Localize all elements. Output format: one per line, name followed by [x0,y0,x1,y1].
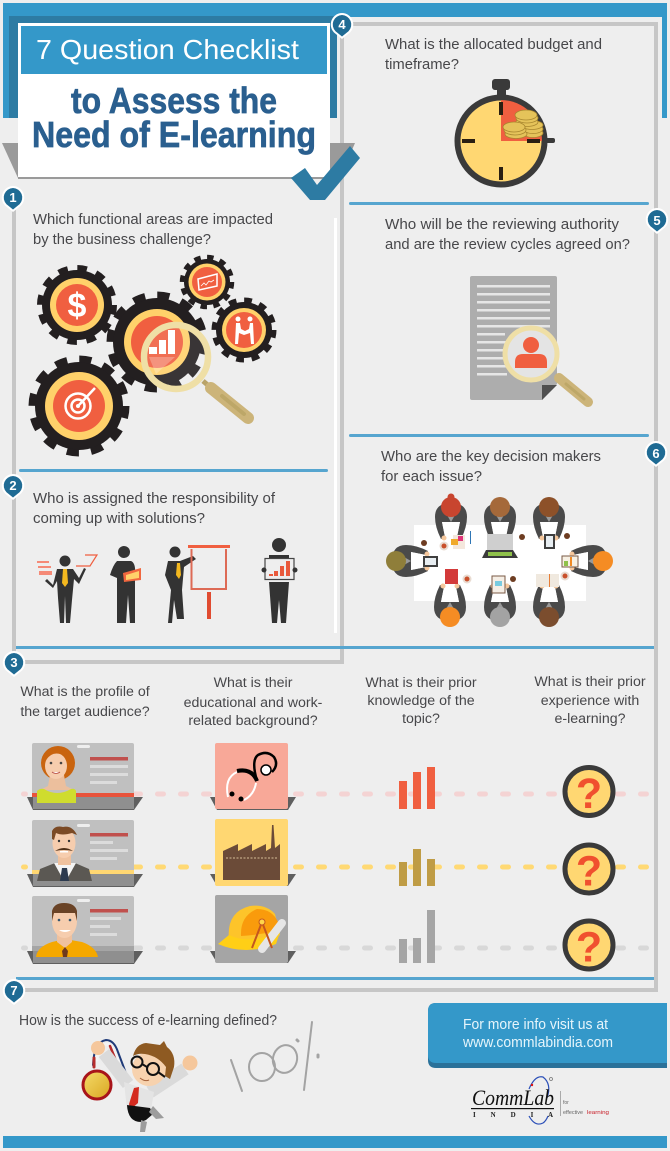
gear: handshake [214,300,274,360]
question 3 column headings: experience with [541,693,639,709]
bar chart: row 2 [399,849,435,886]
profile card: woman [27,743,143,810]
title block: 7 Question Checklist [36,34,299,65]
question 3 column headings [20,674,646,729]
participant top 3 [533,497,565,540]
question 3 column headings: the target audience? [20,704,150,720]
top blue frame [3,3,667,118]
marker 1: 1 [9,190,17,205]
title block [18,23,330,179]
question 3 column headings: What is their prior [534,674,646,690]
person with papers and laptop [37,555,97,623]
icon card: stethoscope [210,743,296,810]
question 3 column headings: What is the profile of [20,684,150,700]
icon: question mark row 1: ? [576,770,602,818]
icon card: hard hat and compass [210,895,296,963]
question 2 text: coming up with solutions? [33,510,205,527]
callout: contact box [428,1003,667,1068]
marker 6 [645,441,667,467]
gear: target [32,359,126,453]
question 7 text: How is the success of e-learning defined? [19,1012,277,1029]
logo: CommLab India: effective [563,1110,583,1116]
marker 4 [331,13,353,39]
question 5 text: and are the review cycles agreed on? [385,236,630,253]
bar chart: row 1 [399,767,435,809]
gear: dollar [40,268,114,342]
illustration: gears and magnifier [32,257,274,453]
head [132,1052,166,1086]
illustration: business people [37,538,298,623]
marker 3 [3,651,25,677]
question 1 text: Which functional areas are impacted [33,211,273,228]
title ribbon tails [2,143,355,178]
logo: CommLab India: I N D I A [473,1111,553,1119]
question 2 text [33,490,276,527]
question 5 text [385,216,630,253]
participant top 2 [484,497,516,540]
bar chart: row 3 [399,910,435,963]
logo: CommLab India: for [563,1100,569,1106]
icon: check mark [291,146,360,200]
illustration: meeting table from above [386,494,613,627]
question 1 text [33,211,273,248]
question 3 column headings: topic? [402,711,440,727]
icon: question mark row 1 [565,768,613,818]
icon card: factory [210,819,296,886]
marker 7 [3,979,25,1005]
medal [83,1071,111,1099]
icon: document under magnifier [470,276,588,402]
logo: CommLab India [471,1077,609,1124]
question 3 column headings: What is their prior [365,675,477,691]
question 3 column headings: educational and work- [184,695,323,711]
question 3 column headings: e-learning? [554,711,626,727]
icon: question mark row 2 [565,845,613,896]
callout: contact box: www.commlabindia.com [462,1035,613,1051]
medal ribbon [93,1040,127,1078]
participant left [386,545,430,577]
logo: CommLab India: CommLab [472,1085,554,1110]
question 5 text: Who will be the reviewing authority [385,216,619,233]
gear: screen [182,257,232,307]
legs and shoes [127,1105,153,1122]
marker 6: 6 [652,446,660,461]
participant bottom 1 [434,584,466,627]
person presenting at board [165,545,230,623]
coins [503,110,543,138]
question 3 column headings: What is their [214,675,293,691]
question 6 text: Who are the key decision makers [381,448,601,465]
dashed row lines [24,794,646,948]
illustration: jumping boy with medal [83,1040,198,1132]
profile card: man with moustache [27,820,143,887]
icon: stopwatch with coins [458,79,555,184]
section divider lines [16,202,654,980]
marker 4: 4 [338,17,346,32]
question 1 text: by the business challenge? [33,231,211,248]
question 6 text: for each issue? [381,468,482,485]
question 4 text [385,36,602,73]
icon: question mark row 3 [565,921,613,972]
arms [104,1053,128,1084]
handwritten 100% [231,1022,318,1091]
marker 5: 5 [653,213,661,228]
torso [124,1082,154,1110]
table items [421,531,578,593]
question 6 text [381,448,601,485]
question 2 text: Who is assigned the responsibility of [33,490,276,507]
participant top 1 [435,494,467,540]
question 3 column headings: related background? [188,713,318,729]
marker 2: 2 [9,478,17,493]
hands [91,1041,105,1055]
title block: Need of E-learning [32,114,316,155]
question 3 column headings: knowledge of the [367,693,475,709]
gear: dollar: $ [68,287,87,325]
marker 7: 7 [10,983,18,998]
magnifier [144,325,248,418]
gear: growth chart [110,295,204,389]
participant right [570,545,613,577]
person holding chart [262,538,298,623]
participant bottom 2 [484,584,516,627]
question 4 text: What is the allocated budget and [385,36,602,53]
icon: question mark row 3: ? [576,924,602,972]
profile card: man in yellow shirt [27,896,143,964]
logo: CommLab India: learning [587,1110,609,1116]
icon: question mark row 2: ? [576,848,602,896]
callout: contact box: For more info visit us at [463,1017,608,1033]
participant bottom 3 [533,584,565,627]
marker 3: 3 [10,655,18,670]
marker 2 [2,474,24,500]
title block: to Assess the [71,80,277,121]
person with tablet [110,546,141,623]
marker 1 [2,186,24,212]
marker 5 [646,208,668,234]
bottom blue bar [3,1136,667,1148]
question 4 text: timeframe? [385,56,459,73]
